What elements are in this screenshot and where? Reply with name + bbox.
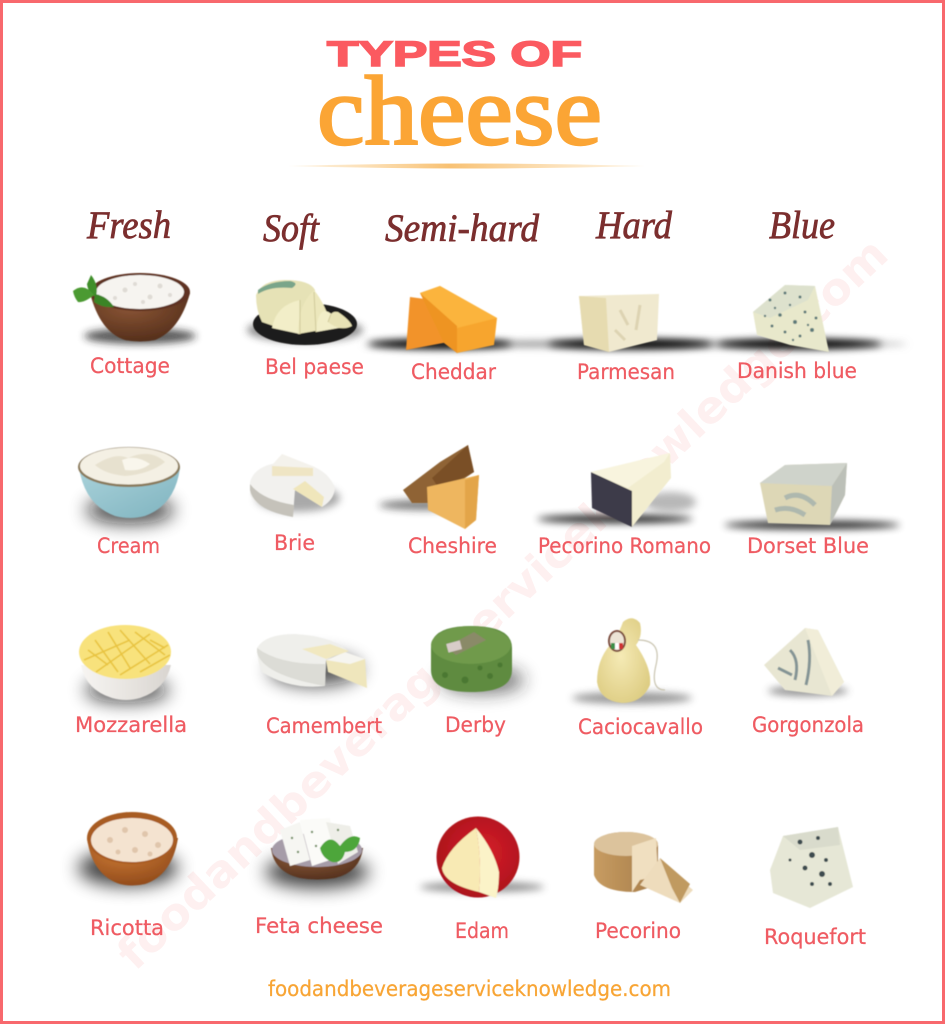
- label: Mozzarella: Mozzarella: [75, 713, 187, 737]
- item: Mozzarella: [75, 625, 187, 737]
- label: Cheddar: Cheddar: [411, 360, 496, 384]
- icon: bel paese on plate: [247, 280, 363, 345]
- label: Derby: Derby: [445, 713, 506, 737]
- icon: roquefort wedge: [770, 827, 853, 908]
- item: Brie: [250, 454, 340, 555]
- icon: cottage cheese bowl: [73, 273, 196, 344]
- item: Parmesan: [577, 294, 675, 384]
- label: Feta cheese: Feta cheese: [255, 914, 383, 938]
- item: Ricotta: [78, 812, 178, 940]
- icon: brie wheel: [250, 454, 340, 517]
- icon: cheddar wedges: [406, 286, 497, 353]
- icon: mozzarella bowl: [79, 625, 171, 703]
- label: Parmesan: Parmesan: [577, 360, 675, 384]
- icon: feta bowl: [265, 818, 369, 888]
- title underline: [288, 164, 645, 168]
- label: Edam: Edam: [455, 919, 509, 943]
- item: Derby: [431, 626, 524, 737]
- item: Dorset Blue: [724, 463, 900, 558]
- heading: Blue: Blue: [769, 204, 835, 247]
- long shadow row 1: [363, 339, 907, 349]
- icon: pecorino wheel and wedge: [594, 832, 693, 903]
- label: Camembert: Camembert: [266, 714, 382, 738]
- item: Caciocavallo: [572, 618, 703, 739]
- heading: Semi-hard: Semi-hard: [385, 207, 539, 250]
- item: Cream: [78, 447, 180, 558]
- item: Cheshire: [379, 445, 497, 558]
- watermark: foodandbeverageserviceknowledge.com: [108, 228, 898, 980]
- label: Danish blue: Danish blue: [737, 359, 857, 383]
- icon: cheshire wedges: [379, 445, 479, 529]
- icon: ricotta bowl: [78, 812, 178, 886]
- item: Roquefort: [764, 827, 866, 949]
- item: Pecorino: [594, 832, 693, 943]
- title: [317, 35, 602, 166]
- icon: edam ball: [420, 816, 544, 898]
- icon: gorgonzola wedge: [764, 628, 848, 696]
- item: Danish blue: [737, 285, 857, 383]
- icon: caciocavallo: [572, 618, 692, 704]
- footer website: foodandbeverageserviceknowledge.com: [268, 977, 671, 1001]
- label: Brie: Brie: [274, 531, 315, 555]
- label: Caciocavallo: Caciocavallo: [578, 715, 703, 739]
- label: Ricotta: Ricotta: [90, 916, 164, 940]
- item: Gorgonzola: [752, 628, 864, 737]
- category headings: [86, 204, 835, 250]
- label: Cheshire: Cheshire: [408, 534, 497, 558]
- label: Pecorino Romano: Pecorino Romano: [538, 534, 711, 558]
- label: Bel paese: Bel paese: [265, 355, 364, 379]
- label: Cottage: Cottage: [90, 354, 170, 378]
- icon: dorset blue wedge: [724, 463, 900, 529]
- label: Pecorino: Pecorino: [595, 919, 681, 943]
- heading: Soft: Soft: [263, 207, 320, 250]
- label: Cream: Cream: [97, 534, 160, 558]
- item: Cottage: [73, 273, 196, 378]
- heading: Hard: Hard: [595, 204, 672, 247]
- icon: derby cheese: [431, 626, 524, 693]
- icon: cream cheese bowl: [78, 447, 180, 524]
- icon: danish blue wedge: [753, 285, 829, 352]
- item: Cheddar: [406, 286, 497, 384]
- item: Feta cheese: [255, 818, 383, 938]
- heading: Fresh: Fresh: [86, 204, 171, 247]
- title line: cheese: cheese: [317, 57, 602, 166]
- label: Gorgonzola: Gorgonzola: [752, 713, 864, 737]
- icon: camembert wheel: [257, 634, 367, 688]
- title line: types of: TYPES OF: [327, 35, 582, 74]
- label: Roquefort: Roquefort: [764, 925, 866, 949]
- item: Pecorino Romano: [537, 453, 711, 558]
- item: Edam: [420, 816, 544, 943]
- item: Camembert: [257, 634, 382, 738]
- icon: pecorino romano wedge: [537, 453, 696, 527]
- item: Bel paese: [247, 280, 364, 379]
- label: Dorset Blue: Dorset Blue: [747, 534, 869, 558]
- icon: parmesan wedge: [579, 294, 659, 352]
